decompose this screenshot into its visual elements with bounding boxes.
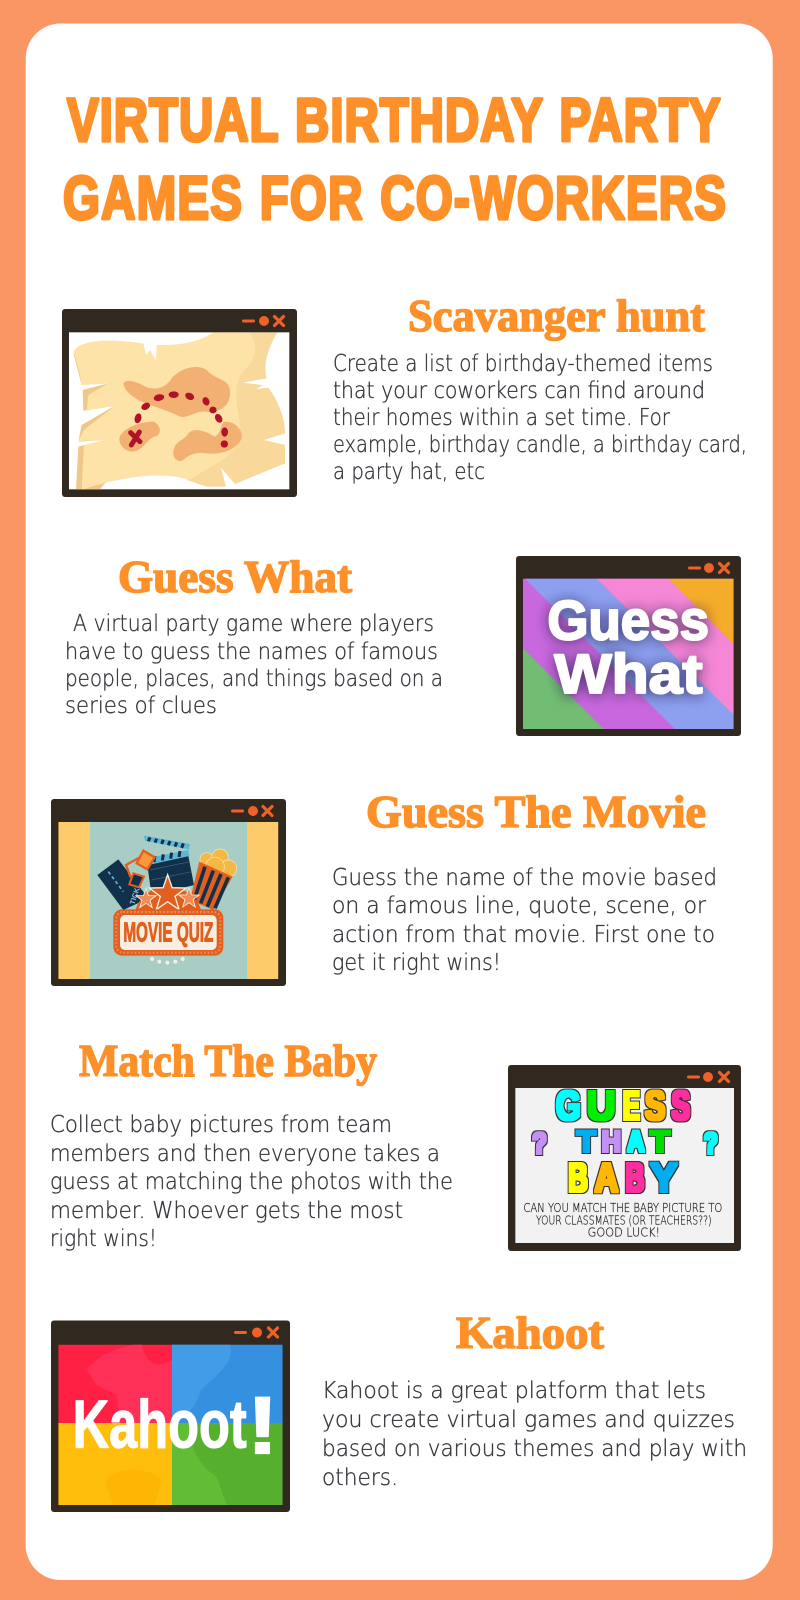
text block: kahoot description: you create virtual games and quizzes <box>322 1407 735 1433</box>
illustration: kahoot logo: Kahoot <box>73 1387 247 1462</box>
text block: guess what description: have to guess the names of famous <box>65 639 438 665</box>
panel: scavenger hunt <box>62 291 747 497</box>
text block: guess the movie description: Guess the name of the movie based <box>332 865 717 891</box>
text block: guess the movie description <box>332 865 717 976</box>
text block: scavanger hunt description: a party hat, etc <box>333 459 485 485</box>
text block: kahoot description: others. <box>322 1465 398 1491</box>
illustration: guess that baby: T <box>577 1126 596 1159</box>
illustration: movie quiz: MOVIE QUIZ <box>123 917 213 948</box>
illustration: kahoot logo: ! <box>247 1381 279 1472</box>
panel: guess what <box>65 552 741 736</box>
window controls <box>242 316 284 326</box>
illustration: guess that baby: T <box>650 1126 670 1159</box>
title <box>63 85 726 232</box>
illustration: guess that baby: B <box>626 1154 644 1200</box>
illustration: guess that baby: ? <box>704 1127 718 1160</box>
title: GAMES FOR CO-WORKERS <box>63 163 726 232</box>
text block: guess the movie description: on a famous line, quote, scene, or <box>332 893 707 919</box>
text block: kahoot description: Kahoot is a great platform that lets <box>322 1378 706 1404</box>
illustration: treasure map <box>69 332 289 489</box>
text block: kahoot description <box>322 1378 747 1491</box>
illustration: guess that baby <box>515 1082 734 1243</box>
window controls <box>231 806 272 816</box>
illustration: guess that baby: E <box>623 1082 640 1128</box>
text block: kahoot description: based on various themes and play with <box>322 1436 747 1462</box>
illustration: kahoot logo <box>58 1345 283 1505</box>
text block: scavanger hunt description: Create a list of birthday-themed items <box>333 351 713 377</box>
illustration: guess that baby: S <box>672 1082 690 1128</box>
illustration: guess that baby: GOOD LUCK! <box>588 1226 660 1240</box>
window frame <box>51 1320 290 1512</box>
text block: guess what description: series of clues <box>65 693 217 719</box>
illustration: guess that baby: B <box>568 1154 588 1200</box>
window: guess that baby <box>508 1065 741 1251</box>
text block: guess what description <box>65 611 443 719</box>
window controls <box>687 1072 728 1082</box>
text block: match the baby description: right wins! <box>50 1226 157 1252</box>
illustration: guess that baby: H <box>602 1126 621 1159</box>
panel: match the baby <box>50 1036 741 1252</box>
illustration: guess what stripes: What <box>554 642 703 705</box>
text block: scavanger hunt description: their homes within a set time. For <box>333 405 670 431</box>
illustration: guess that baby: CAN YOU MATCH THE BABY PICTURE TO <box>523 1201 722 1215</box>
text block: guess what description: people, places, and things based on a <box>65 666 443 692</box>
illustration: guess that baby: A <box>595 1154 618 1200</box>
illustration: guess that baby: S <box>645 1082 665 1128</box>
window frame <box>508 1065 741 1251</box>
illustration: movie quiz: TICKET <box>128 877 145 906</box>
window frame <box>51 799 286 986</box>
illustration: guess that baby: Y <box>650 1154 678 1200</box>
text block: guess the movie description: get it right wins! <box>332 950 501 976</box>
heading: match the baby: Match The Baby <box>79 1036 377 1086</box>
illustration: guess that baby: A <box>627 1126 644 1159</box>
text block: guess the movie description: action from that movie. First one to <box>332 922 715 948</box>
illustration: guess that baby: ? <box>532 1127 547 1160</box>
illustration: guess that baby: U <box>587 1082 616 1128</box>
panel: guess the movie <box>51 787 717 986</box>
text block: match the baby description <box>50 1112 453 1252</box>
window: guess what <box>516 556 741 736</box>
heading: scavanger hunt: Scavanger hunt <box>408 291 705 341</box>
text block: scavanger hunt description <box>333 351 747 485</box>
panel: kahoot <box>51 1308 747 1512</box>
heading: kahoot: Kahoot <box>456 1308 604 1358</box>
title: VIRTUAL BIRTHDAY PARTY <box>67 85 721 154</box>
illustration: guess that baby: G <box>556 1082 581 1128</box>
window controls <box>688 563 728 573</box>
window frame <box>62 309 297 497</box>
illustration: guess that baby: YOUR CLASSMATES (OR TEACHERS??) <box>536 1213 712 1227</box>
heading: guess what: Guess What <box>118 552 352 602</box>
text block: match the baby description: member. Whoever gets the most <box>50 1198 403 1224</box>
illustration: guess what stripes: Guess <box>547 588 709 651</box>
text block: guess what description: A virtual party game where players <box>73 611 434 637</box>
window frame <box>516 556 741 736</box>
text block: match the baby description: guess at matching the photos with the <box>50 1169 453 1195</box>
window: movie quiz <box>51 799 286 986</box>
text block: match the baby description: Collect baby pictures from team <box>50 1112 392 1138</box>
text block: scavanger hunt description: that your coworkers can find around <box>333 378 705 404</box>
window controls <box>234 1328 278 1338</box>
window: treasure map <box>62 309 297 497</box>
illustration: movie quiz <box>58 822 278 979</box>
text block: match the baby description: members and then everyone takes a <box>50 1141 440 1167</box>
window: kahoot <box>51 1320 290 1512</box>
heading: guess the movie: Guess The Movie <box>366 787 706 837</box>
illustration: guess what stripes <box>523 579 734 729</box>
